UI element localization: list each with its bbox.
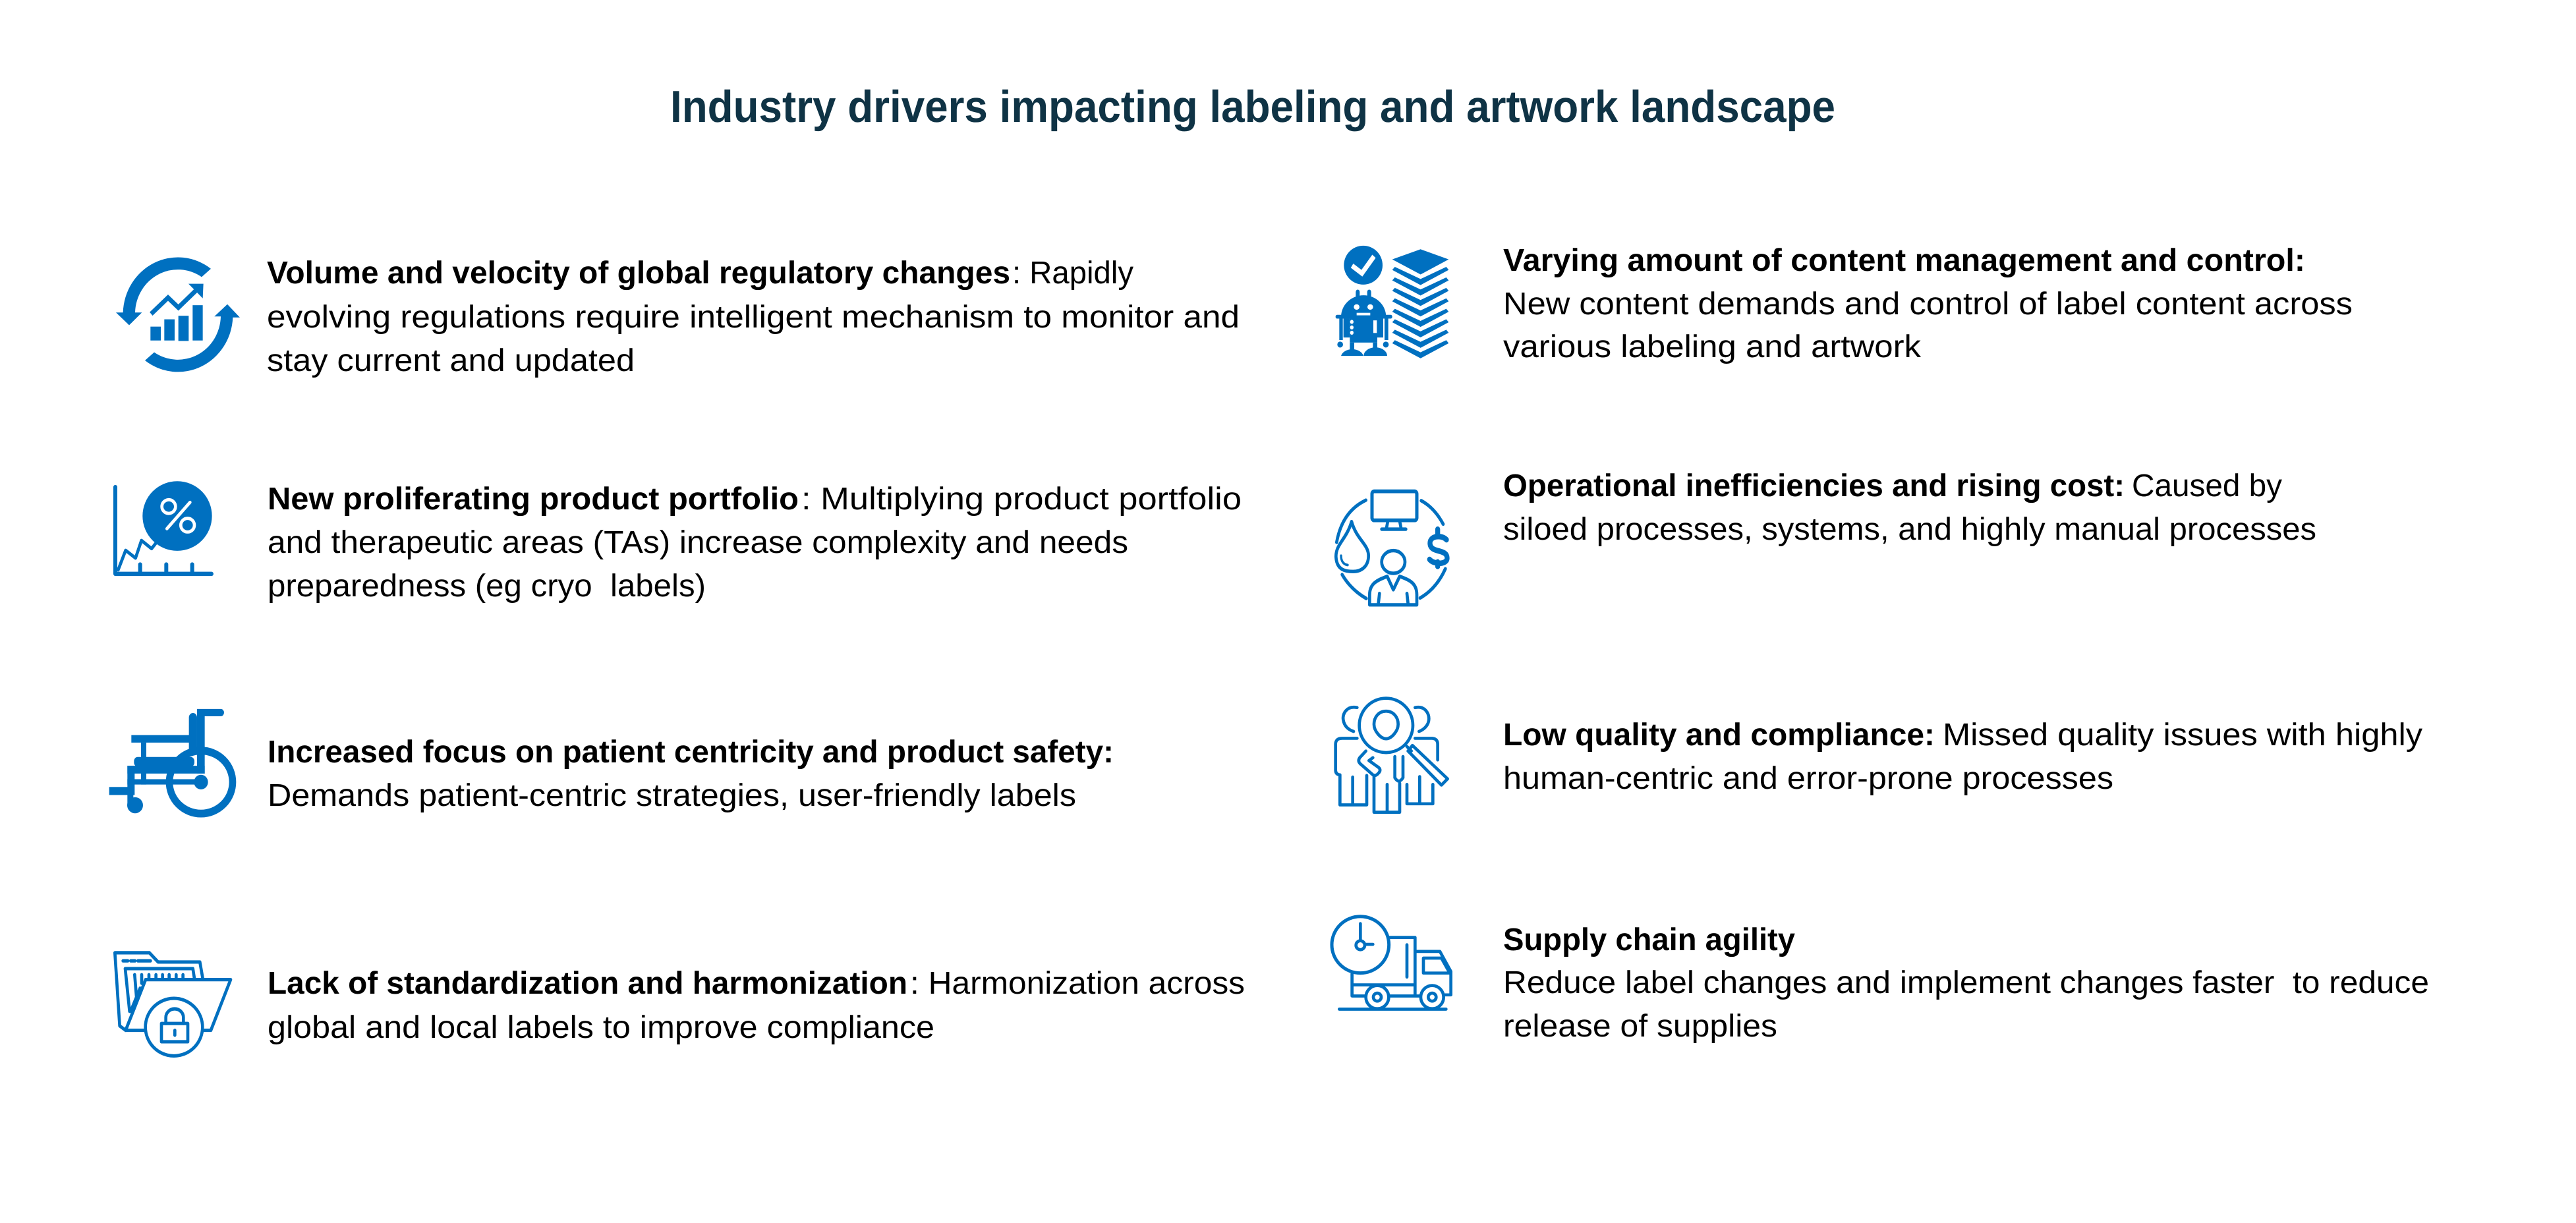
text: content management and control: Varying amount of content management and control: — [1503, 243, 2305, 278]
text: content management and control — [1503, 243, 2353, 364]
text: operational inefficiencies: Operational inefficiencies and rising cost: — [1503, 469, 2125, 503]
icon: percent bubble on line chart — [115, 481, 212, 574]
icon: monitor, drop, dollar and person cycle — [1336, 492, 1447, 605]
text: patient centricity — [268, 735, 1114, 813]
text: low quality and compliance: Low quality and compliance: — [1503, 718, 1935, 753]
text: supply chain agility: Reduce label changes and implement changes faster to reduce — [1503, 965, 2429, 1000]
text: operational inefficiencies: siloed processes, systems, and highly manual processes — [1503, 512, 2316, 547]
text: supply chain agility — [1503, 923, 2429, 1044]
text: content management and control: various labeling and artwork — [1503, 329, 1922, 364]
text: standardization and harmonization: : Harmonization across — [910, 966, 1245, 1001]
text: standardization and harmonization: global and local labels to improve compliance — [268, 1010, 934, 1045]
text: new proliferating product portfolio — [268, 482, 1242, 604]
icon: robot with document stack — [1336, 246, 1448, 358]
text: volume and velocity: Volume and velocity of global regulatory changes — [267, 256, 1010, 291]
icon: wheelchair — [109, 709, 233, 814]
text: new proliferating product portfolio: New proliferating product portfolio — [268, 482, 799, 517]
text: volume and velocity: stay current and updated — [267, 343, 635, 378]
title: Industry drivers impacting labeling and artwork landscape — [670, 82, 1835, 132]
text: new proliferating product portfolio: preparedness (eg cryo labels) — [268, 569, 706, 604]
text: operational inefficiencies — [1503, 469, 2316, 547]
text: new proliferating product portfolio: : Multiplying product portfolio — [801, 482, 1242, 517]
icon: delivery truck with clock — [1332, 917, 1451, 1009]
text: content management and control: New content demands and control of label content across — [1503, 287, 2353, 322]
text: supply chain agility: release of supplies — [1503, 1009, 1777, 1044]
text: low quality and compliance: Missed quality issues with highly — [1943, 718, 2422, 753]
text: volume and velocity: evolving regulations require intelligent mechanism to monitor and — [267, 300, 1240, 335]
text: patient centricity: Increased focus on patient centricity and product safety: — [268, 735, 1114, 770]
text: standardization and harmonization — [268, 966, 1245, 1045]
panel: left column drivers — [109, 256, 1245, 1056]
text: operational inefficiencies: Caused by — [2132, 469, 2282, 503]
icon: locked folder — [115, 953, 231, 1056]
text: standardization and harmonization: Lack of standardization and harmonization — [268, 966, 907, 1001]
text: low quality and compliance — [1503, 718, 2422, 796]
icon: refresh arrows with growth chart — [116, 258, 240, 372]
panel: right column drivers — [1332, 243, 2429, 1044]
text: supply chain agility: Supply chain agility — [1503, 923, 1795, 957]
text: volume and velocity: : Rapidly — [1012, 256, 1133, 291]
text: volume and velocity — [267, 256, 1240, 378]
icon: people under magnifier — [1336, 698, 1448, 812]
text: new proliferating product portfolio: and therapeutic areas (TAs) increase complexity and needs — [268, 525, 1128, 560]
text: patient centricity: Demands patient-centric strategies, user-friendly labels — [268, 778, 1076, 813]
text: low quality and compliance: human-centric and error-prone processes — [1503, 761, 2113, 796]
